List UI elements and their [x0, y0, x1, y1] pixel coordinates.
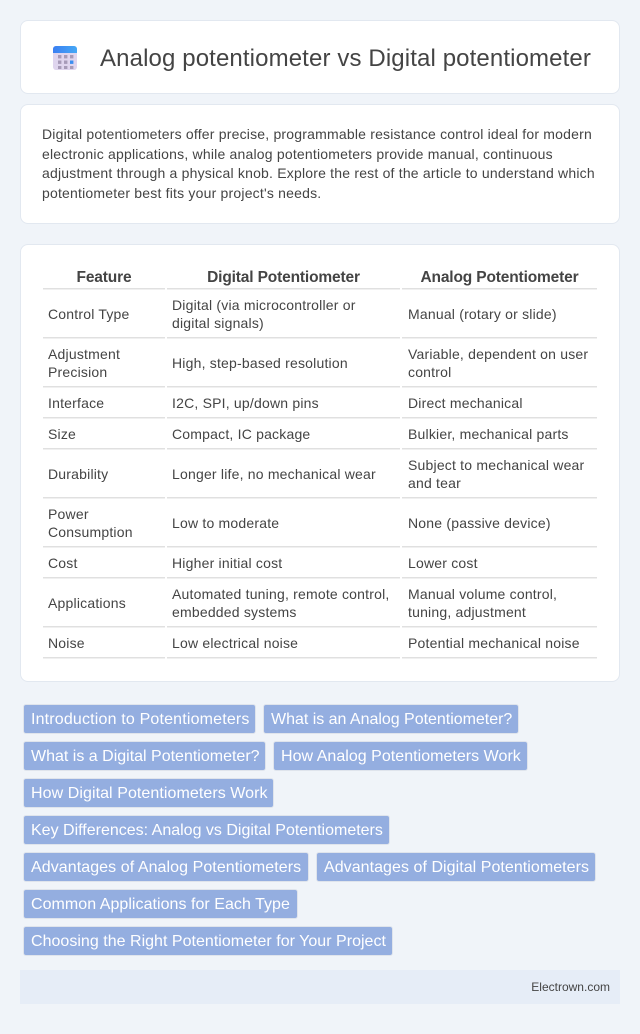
topic tags [23, 704, 596, 956]
row: applications: embedded systems [172, 604, 297, 620]
row: control type [48, 297, 557, 331]
row: power consumption [48, 506, 551, 540]
tag [316, 852, 596, 882]
table header [77, 269, 579, 286]
tag: Advantages of Analog Potentiometers [31, 859, 301, 876]
row: power consumption: None (passive device) [408, 515, 551, 531]
row: durability: Longer life, no mechanical wear [172, 466, 376, 482]
intro text panel [20, 104, 620, 224]
row: durability: Durability [48, 466, 108, 482]
intro paragraph: electronic applications, while analog potentiometers provide manual, continuous [42, 146, 553, 162]
row: control type: digital signals) [172, 315, 264, 331]
row: adjustment precision: Precision [48, 364, 107, 380]
tag: Introduction to Potentiometers [31, 711, 250, 728]
row: size: Bulkier, mechanical parts [408, 426, 569, 442]
row: applications: tuning, adjustment [408, 604, 526, 620]
title: Analog potentiometer vs Digital potentiometer [100, 45, 591, 72]
row: control type: Digital (via microcontroller or [172, 297, 356, 313]
tag [23, 778, 274, 808]
table header: Digital Potentiometer [207, 269, 360, 286]
row: interface: Direct mechanical [408, 395, 523, 411]
footer bar [20, 970, 620, 1004]
icon: calendar [53, 46, 77, 70]
tag [23, 852, 309, 882]
tag [263, 704, 519, 734]
row: noise: Low electrical noise [172, 635, 298, 651]
row: noise [48, 635, 580, 651]
row: size: Compact, IC package [172, 426, 310, 442]
tag [23, 704, 256, 734]
row: cost: Higher initial cost [172, 555, 282, 571]
comparison table panel [20, 244, 620, 682]
row: applications [48, 586, 557, 620]
table header: Feature [77, 269, 131, 286]
row: adjustment precision [48, 346, 588, 380]
header panel [20, 20, 620, 94]
row: size: Size [48, 426, 76, 442]
row: size [48, 426, 569, 442]
tag: Choosing the Right Potentiometer for Your Project [31, 933, 386, 950]
row: adjustment precision: Variable, dependent on user [408, 346, 588, 362]
row: applications: Applications [48, 595, 126, 611]
row: noise: Noise [48, 635, 85, 651]
tag: What is a Digital Potentiometer? [31, 748, 260, 765]
tag [23, 741, 266, 771]
row: noise: Potential mechanical noise [408, 635, 580, 651]
row: power consumption: Power [48, 506, 89, 522]
row: power consumption: Low to moderate [172, 515, 279, 531]
intro paragraph: Digital potentiometers offer precise, programmable resistance control ideal for modern [42, 126, 592, 142]
row: interface: I2C, SPI, up/down pins [172, 395, 319, 411]
tag: Advantages of Digital Potentiometers [324, 859, 589, 876]
tag [23, 926, 393, 956]
row: durability: Subject to mechanical wear [408, 457, 584, 473]
row: control type: Control Type [48, 306, 130, 322]
row: interface [48, 395, 523, 411]
row: interface: Interface [48, 395, 104, 411]
row: power consumption: Consumption [48, 524, 133, 540]
row: applications: Manual volume control, [408, 586, 557, 602]
tag: What is an Analog Potentiometer? [271, 711, 512, 728]
intro paragraph [42, 126, 595, 201]
tag: How Analog Potentiometers Work [281, 748, 521, 765]
tag: Common Applications for Each Type [31, 896, 290, 913]
row: durability [48, 457, 584, 491]
tag [273, 741, 528, 771]
tag: How Digital Potentiometers Work [31, 785, 268, 802]
row: applications: Automated tuning, remote control, [172, 586, 390, 602]
row: cost [48, 555, 478, 571]
table [43, 269, 597, 659]
table header: Analog Potentiometer [420, 269, 579, 286]
row: adjustment precision: Adjustment [48, 346, 120, 362]
row: durability: and tear [408, 475, 461, 491]
row: adjustment precision: High, step-based resolution [172, 355, 348, 371]
tag: Key Differences: Analog vs Digital Potentiometers [31, 822, 383, 839]
row: adjustment precision: control [408, 364, 451, 380]
row: cost: Cost [48, 555, 78, 571]
tag [23, 889, 298, 919]
intro paragraph: potentiometer best fits your project's needs. [42, 184, 321, 200]
row: cost: Lower cost [408, 555, 478, 571]
tag [23, 815, 390, 845]
footer credit: Electrown.com [531, 980, 610, 994]
row: control type: Manual (rotary or slide) [408, 306, 557, 322]
intro paragraph: adjustment through a physical knob. Explore the rest of the article to understand which [42, 165, 595, 181]
